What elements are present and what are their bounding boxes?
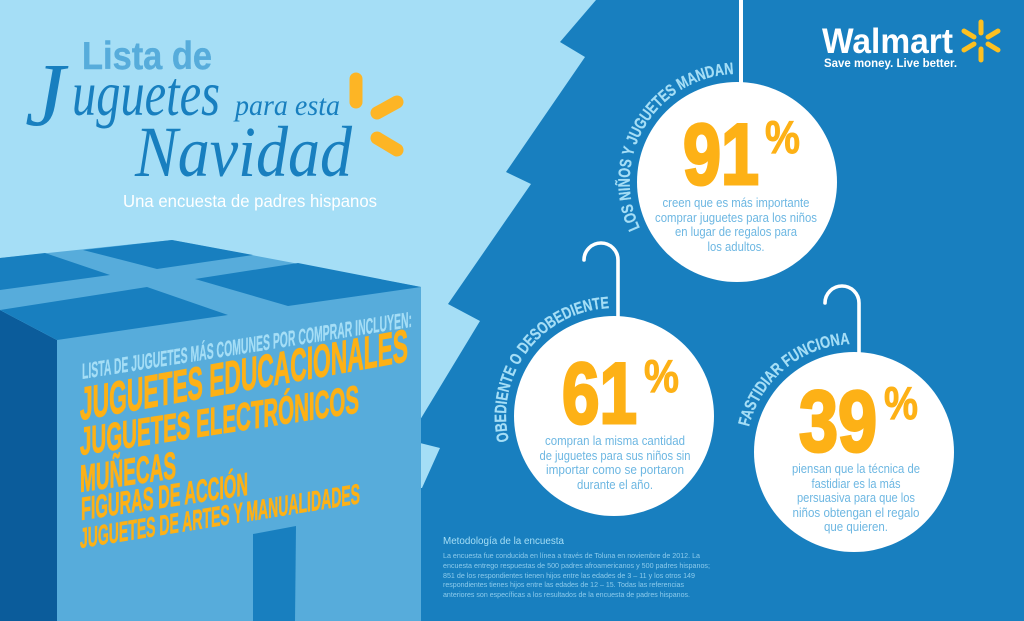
ornament: 91 percent [614,0,837,282]
ornament: 91 percent: LOS NIÑOS Y JUGUETES MANDAN [614,62,733,232]
box text: toy list: FIGURAS DE ACCIÓN [81,466,248,527]
ornament: 91 percent: en lugar de regalos para [675,225,797,239]
panel: gift box [0,240,421,621]
box text: toy list: MUÑECAS [80,443,176,501]
ornament: 91 percent: los adultos. [708,240,764,254]
icon: title spark [356,79,397,150]
ornament: 61 percent: % [644,350,679,402]
ornament: 61 percent: de juguetes para sus niños sin [540,449,691,463]
ornament: 39 percent: persuasiva para que los [797,491,915,505]
ornament: 39 percent: FASTIDIAR FUNCIONA [738,332,850,426]
text block: survey methodology: encuesta entrego respuestas de 500 padres afroamericanos y 500 padres hispanos; [443,561,710,570]
ornament: 91 percent: 91 [683,107,759,203]
ornament: 39 percent: que quieren. [824,520,888,534]
title: J [25,46,69,145]
ornament: 61 percent: 61 [562,346,637,442]
ornament: 39 percent: % [884,377,918,429]
ornament: 91 percent: creen que es más importante [662,196,810,210]
ornament: 61 percent: importar como se portaron [546,463,684,477]
text block: survey methodology: Metodología de la encuesta [443,536,564,547]
box text: toy list [80,307,412,554]
title [25,35,353,192]
text block: survey methodology: 851 de los respondientes tienen hijos entre las edades de 3 – 11 y los otros 149 [443,571,695,580]
title: para esta [233,89,340,122]
ornament: 39 percent [738,284,954,552]
logo: Walmart [822,22,998,70]
text block: survey methodology [443,536,710,599]
ornament: 61 percent [494,241,714,516]
ornament: 61 percent: compran la misma cantidad [545,434,685,448]
ornament: 39 percent: fastidiar es la más [812,477,900,491]
ornament: 61 percent: durante el año. [577,478,653,492]
logo: Walmart: Save money. Live better. [824,56,957,70]
ornament: 91 percent: comprar juguetes para los niños [655,211,817,225]
subtitle: Una encuesta de padres hispanos [123,191,377,211]
title: uguetes [72,58,220,129]
text block: survey methodology: La encuesta fue conducida en línea a través de Toluna en noviembre de 2012. La [443,551,701,560]
ornament: 91 percent: % [765,111,800,163]
ornament: 61 percent: OBEDIENTE O DESOBEDIENTE [494,296,609,442]
box text: toy list: JUGUETES ELECTRÓNICOS [80,378,359,464]
ornament: 39 percent: niños obtengan el regalo [792,506,920,520]
text block: survey methodology: anteriores son específicas a los resultados de la encuesta de padres hispanos. [443,590,690,599]
panel: dark blue tree background [420,0,1024,621]
text: LISTA DE JUGUETES MÁS COMUNES POR COMPRAR INCLUYEN: [82,307,412,384]
text block: survey methodology: respondientes tienes hijos entre las edades de 12 – 15. Todas las referencias [443,580,684,589]
logo: Walmart: Walmart [822,22,953,61]
title: Navidad [134,112,353,192]
box text: toy list: JUGUETES DE ARTES Y MANUALIDADES [80,477,360,554]
ornament: 39 percent: piensan que la técnica de [792,462,920,476]
title: Lista de [82,35,212,78]
box text: toy list: JUGUETES EDUCACIONALES [80,319,408,430]
ornament: 39 percent: 39 [799,374,877,470]
